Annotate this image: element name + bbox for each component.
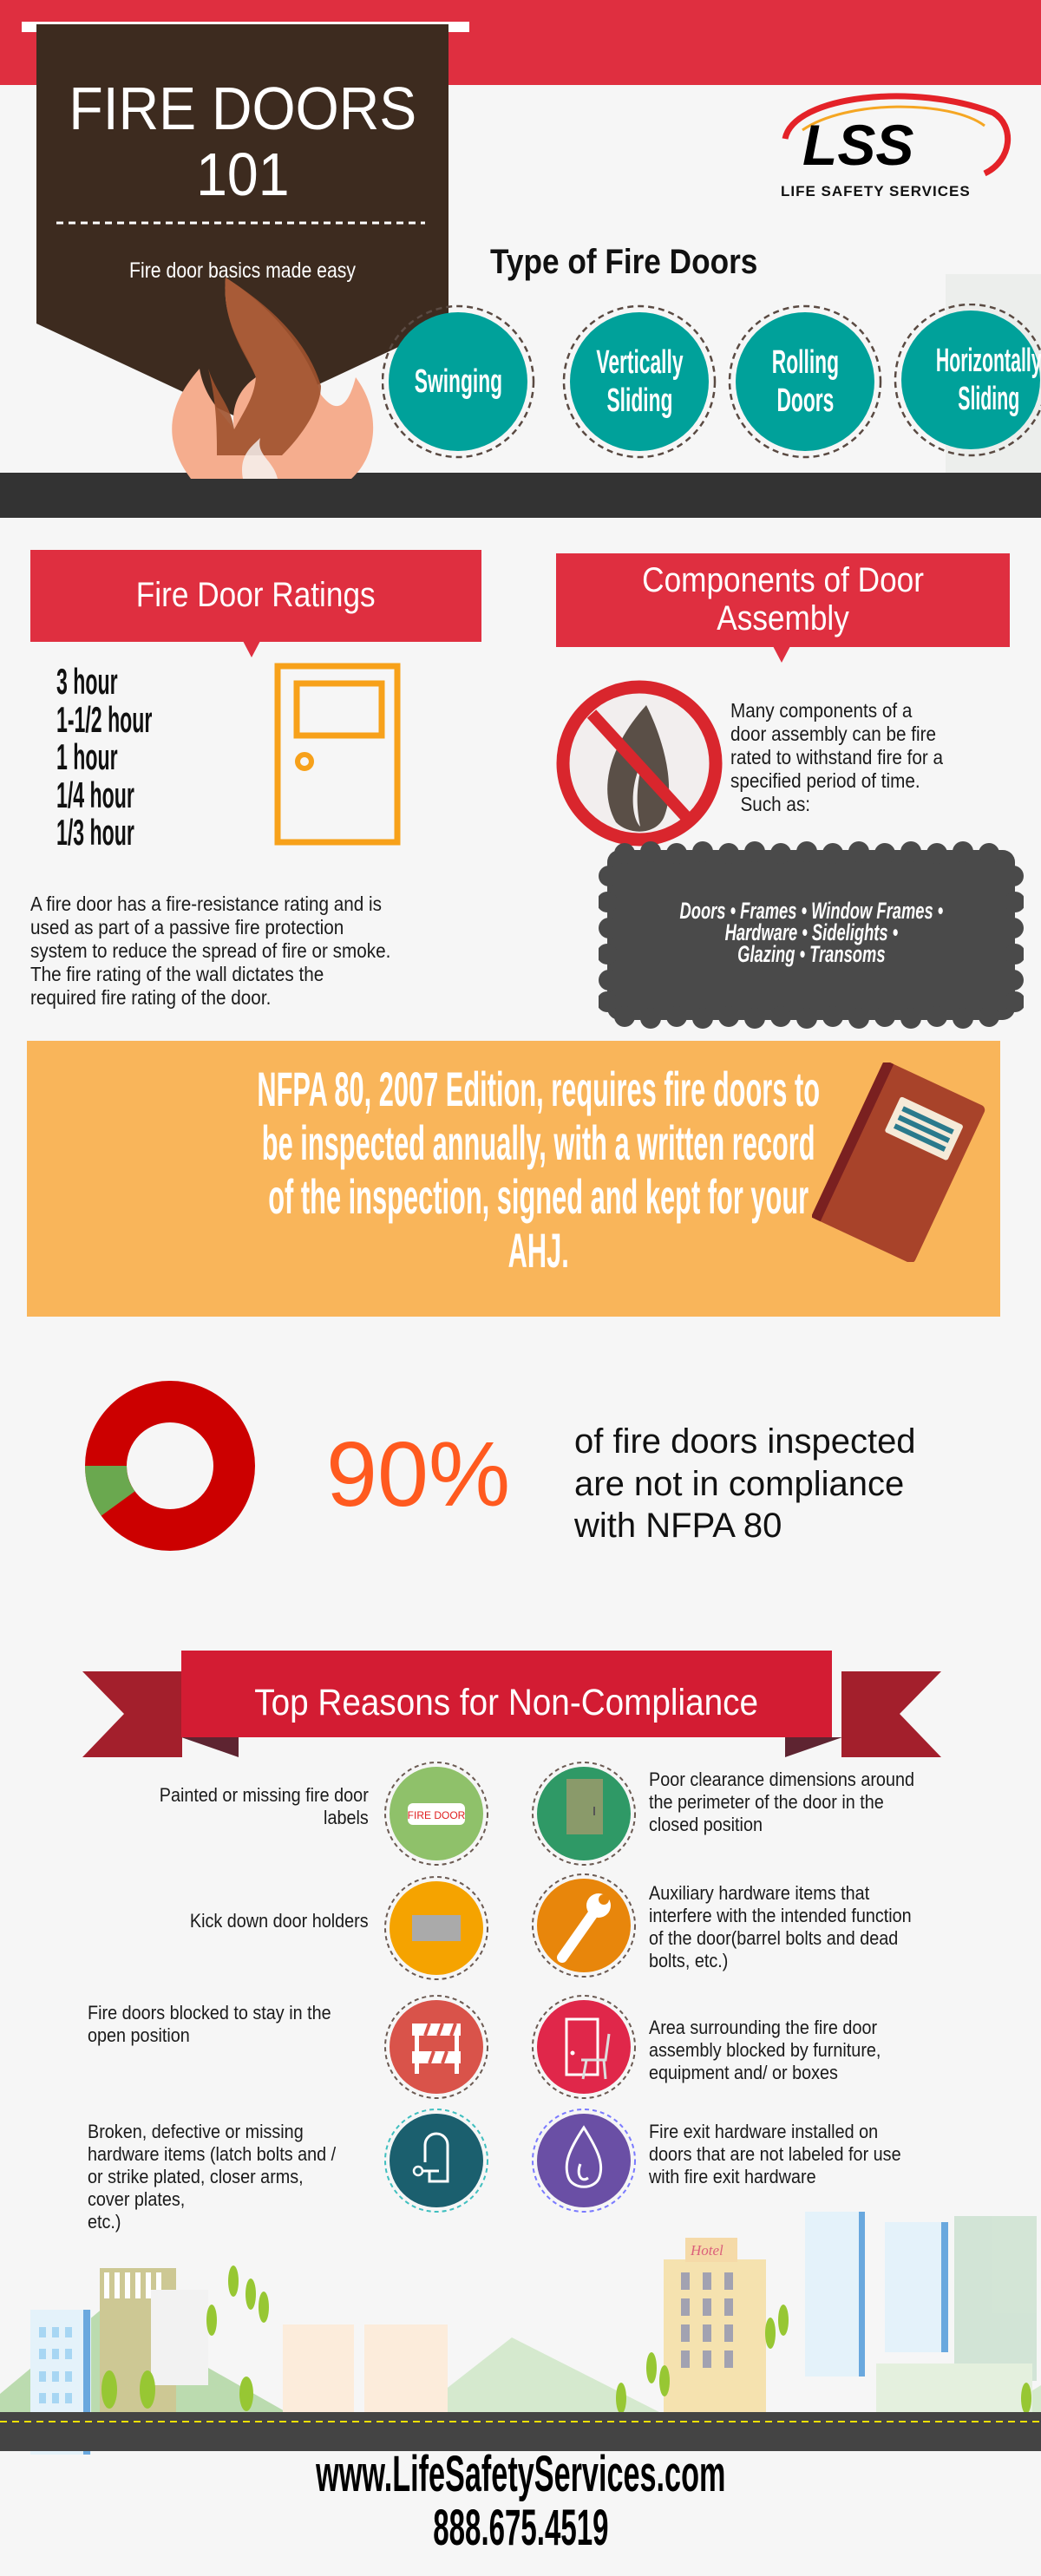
reason: auxiliary hardware: of the door(barrel bolts and dead	[649, 1927, 898, 1949]
icon: flame	[172, 278, 373, 479]
logo: LSS: LSS	[802, 113, 913, 177]
components text: door assembly can be fire	[730, 722, 936, 745]
stat description: with NFPA 80	[574, 1507, 782, 1545]
reason: area blocked	[649, 2017, 881, 2083]
logo: LSS	[781, 93, 1012, 199]
circle: swinging: Swinging	[414, 363, 502, 400]
reason: broken hardware: hardware items (latch bolts and /	[88, 2143, 336, 2165]
panel: component list: Hardware • Sidelights •	[724, 919, 898, 945]
reason: clearance: the perimeter of the door in the	[649, 1791, 884, 1813]
title text	[69, 75, 416, 208]
reason: painted labels: labels	[324, 1807, 369, 1828]
reason: broken hardware: cover plates,	[88, 2188, 185, 2210]
NFPA text: be inspected annually, with a written record	[262, 1115, 815, 1170]
circle: rolling doors: Rolling	[771, 344, 839, 381]
icon: book	[812, 1062, 985, 1262]
ratings list	[56, 661, 152, 853]
reason: fire exit hardware: Fire exit hardware installed on	[649, 2121, 878, 2142]
panel: NFPA callout	[27, 1041, 1000, 1317]
reason: clearance	[649, 1769, 914, 1835]
footer: website and phone: 888.675.4519	[433, 2500, 608, 2556]
circle: rolling doors	[771, 344, 839, 419]
footer: website and phone	[316, 2446, 725, 2556]
heading: type of fire doors: Type of Fire Doors	[490, 243, 757, 281]
title text: FIRE DOORS	[69, 75, 416, 142]
circle: vertically sliding	[596, 344, 684, 419]
panel: component list	[599, 841, 1024, 1029]
icon: padlock	[390, 2114, 483, 2207]
ratings list: 3 hour	[56, 661, 118, 702]
circle: horizontally sliding: Sliding	[958, 381, 1019, 417]
reason: painted labels: Painted or missing fire door	[160, 1784, 369, 1806]
panel: components header: Components of Door	[642, 561, 924, 599]
circle: horizontally sliding	[936, 343, 1041, 417]
ratings paragraph	[30, 892, 390, 1009]
ratings paragraph: system to reduce the spread of fire or smoke.	[30, 939, 390, 962]
components text	[730, 699, 943, 815]
reason: blocked open: open position	[88, 2024, 190, 2046]
top red band	[0, 0, 1041, 85]
icon: kick down holder	[390, 1881, 483, 1975]
ribbon: top reasons heading	[82, 1651, 941, 1757]
reason: broken hardware: Broken, defective or missing	[88, 2121, 304, 2142]
reason: auxiliary hardware	[649, 1882, 912, 1971]
ratings paragraph: used as part of a passive fire protection	[30, 916, 344, 938]
icon: no fire	[557, 680, 722, 847]
panel: components header	[556, 553, 1010, 663]
reason: auxiliary hardware: interfere with the intended function	[649, 1905, 912, 1926]
stat: 90%: 90%	[326, 1423, 510, 1526]
reason: fire exit hardware: with fire exit hardware	[649, 2166, 816, 2187]
reason: broken hardware	[88, 2121, 337, 2233]
NFPA text: NFPA 80, 2007 Edition, requires fire doors to	[257, 1062, 820, 1116]
faint background panel	[946, 274, 1041, 473]
panel: fire door ratings header	[30, 550, 481, 657]
icon: door blocked by chair	[537, 2000, 631, 2094]
panel: component list: Glazing • Transoms	[737, 941, 885, 967]
icon: door	[274, 663, 401, 845]
reason: kick down: Kick down door holders	[190, 1910, 369, 1932]
ratings list: 1/3 hour	[56, 812, 134, 853]
logo: LSS: LIFE SAFETY SERVICES	[781, 183, 971, 199]
chart: donut 90%	[85, 1381, 255, 1551]
subtitle: Fire door basics made easy	[129, 258, 356, 283]
reason: clearance: closed position	[649, 1814, 763, 1835]
panel: component list: Doors • Frames • Window Frames •	[679, 898, 943, 924]
icon: fire door label: FIRE DOOR	[408, 1809, 466, 1821]
stat description: are not in compliance	[574, 1464, 904, 1502]
reason: blocked open	[88, 2002, 331, 2046]
reason: broken hardware: or strike plated, closer arms,	[88, 2166, 304, 2187]
title text: 101	[196, 141, 289, 208]
reason: fire exit hardware	[649, 2121, 901, 2187]
NFPA text: of the inspection, signed and kept for your	[268, 1169, 809, 1224]
reason: area blocked: Area surrounding the fire door	[649, 2017, 877, 2038]
footer: website and phone: www.LifeSafetyServices.com	[316, 2446, 725, 2502]
reason: auxiliary hardware: Auxiliary hardware items that	[649, 1882, 869, 1904]
components text: specified period of time.	[730, 769, 920, 792]
ratings paragraph: The fire rating of the wall dictates the	[30, 963, 324, 985]
icon: door clearance	[537, 1767, 631, 1860]
NFPA text	[257, 1062, 820, 1278]
panel: fire door ratings header: Fire Door Ratings	[136, 576, 376, 614]
circle: rolling doors: Doors	[776, 382, 834, 419]
reason: clearance: Poor clearance dimensions around	[649, 1769, 914, 1790]
illustration: city skyline and road: Hotel	[690, 2242, 723, 2259]
reason: auxiliary hardware: bolts, etc.)	[649, 1950, 728, 1971]
ratings paragraph: A fire door has a fire-resistance rating and is	[30, 892, 382, 915]
circle: vertically sliding: Vertically	[596, 344, 683, 381]
icon: barrier	[390, 2000, 483, 2094]
panel: components header: Assembly	[717, 599, 849, 637]
ratings paragraph: required fire rating of the door.	[30, 986, 271, 1009]
reason: area blocked: equipment and/ or boxes	[649, 2062, 838, 2083]
dark strip under hero	[0, 473, 1041, 518]
icon: flame outline	[537, 2114, 631, 2207]
reason: blocked open: Fire doors blocked to stay in the	[88, 2002, 331, 2024]
reason: area blocked: assembly blocked by furniture,	[649, 2039, 881, 2061]
stat description: of fire doors inspected	[574, 1422, 916, 1461]
reason: fire exit hardware: doors that are not labeled for use	[649, 2143, 901, 2165]
title banner	[22, 22, 469, 479]
illustration: city skyline and road	[0, 2212, 1041, 2455]
ratings list: 1/4 hour	[56, 774, 134, 815]
ratings list: 1 hour	[56, 736, 118, 777]
ribbon: top reasons heading: Top Reasons for Non-Compliance	[255, 1682, 758, 1723]
NFPA text: AHJ.	[508, 1223, 569, 1278]
reason: broken hardware: etc.)	[88, 2211, 121, 2233]
circle: horizontally sliding: Horizontally	[936, 343, 1041, 379]
circle: vertically sliding: Sliding	[606, 382, 672, 419]
reason icons	[384, 1762, 636, 2213]
door type circles	[382, 304, 1041, 458]
ratings list: 1-1/2 hour	[56, 699, 152, 739]
components text: Such as:	[740, 793, 810, 815]
icon: wrench	[537, 1879, 631, 1972]
stat description	[574, 1422, 916, 1545]
reason: painted labels	[160, 1784, 369, 1828]
components text: rated to withstand fire for a	[730, 746, 943, 768]
components text: Many components of a	[730, 699, 912, 722]
icon: fire door label	[390, 1767, 483, 1860]
